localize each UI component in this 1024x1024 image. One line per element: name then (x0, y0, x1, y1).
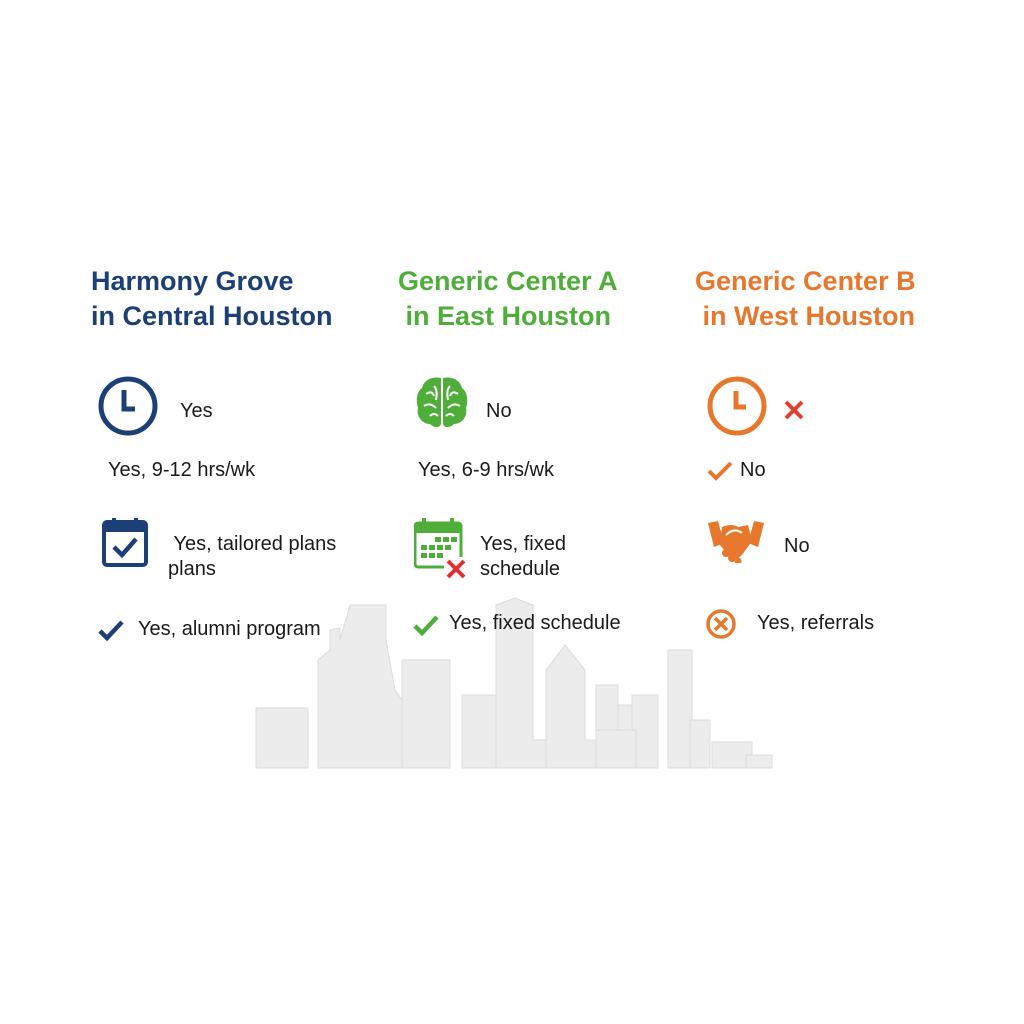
text: fixed schedule: schedule (480, 558, 560, 580)
text: referrals: Yes, referrals (757, 612, 874, 634)
icon: navy clock (98, 376, 158, 436)
column 1 title (91, 266, 332, 331)
text: fixed schedule (480, 533, 566, 580)
column 3 title (695, 266, 916, 331)
icon: red x (784, 400, 804, 420)
text: hours 2: Yes, 6-9 hrs/wk (418, 459, 554, 481)
text: tailored plans (168, 533, 336, 580)
icon: navy calendar check (102, 518, 148, 567)
icon: orange handshake (708, 521, 764, 563)
text: tailored plans: Yes, tailored plans (174, 533, 336, 555)
column 3 title: Generic Center B (695, 266, 916, 296)
text: hours 1: Yes, 9-12 hrs/wk (108, 459, 255, 481)
text: No: No (740, 459, 766, 481)
icon: orange clock (708, 376, 766, 436)
text: No: No (486, 400, 512, 422)
text: No: No (784, 535, 810, 557)
column 2 title: in East Houston (406, 301, 611, 331)
icon: green calendar with red x (414, 518, 466, 578)
icon: green check (414, 616, 438, 636)
text: fixed schedule: Yes, fixed (480, 533, 566, 555)
column 2 title: Generic Center A (398, 266, 618, 296)
icon: green brain (416, 378, 468, 427)
column 3 title: in West Houston (702, 301, 915, 331)
column 2 title (398, 266, 618, 331)
icon: orange check (708, 462, 732, 481)
text: fixed schedule 2: Yes, fixed schedule (449, 612, 621, 634)
text: alumni: Yes, alumni program (138, 618, 321, 640)
text: tailored plans: plans (168, 558, 216, 580)
text: Yes: Yes (180, 400, 213, 422)
icon: navy check (98, 620, 124, 641)
column 1 title: Harmony Grove (91, 266, 294, 296)
icon: orange circled x (706, 609, 736, 639)
column 1 title: in Central Houston (91, 301, 332, 331)
